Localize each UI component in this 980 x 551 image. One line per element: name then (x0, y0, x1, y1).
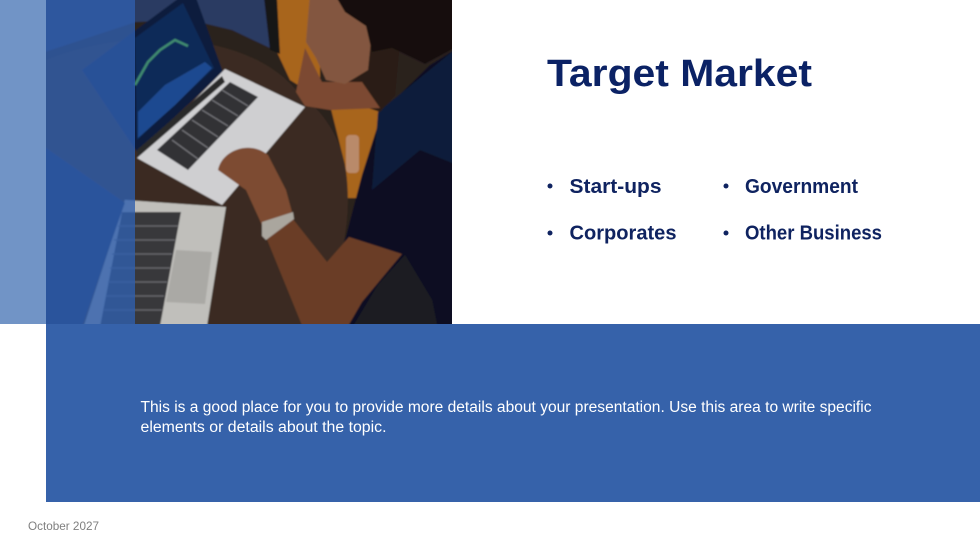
description text: elements or details about the topic. (140, 419, 386, 436)
hand (218, 148, 292, 225)
description text: This is a good place for you to provide more details about your presentation. Use this area to write specific (140, 399, 872, 416)
left light blue strip (0, 0, 46, 324)
bullet: Other Business: Other Business (745, 222, 882, 244)
photo: man working on laptops (46, 0, 452, 324)
round table (135, 45, 349, 324)
water bottle (346, 135, 359, 173)
blue text band (46, 324, 980, 502)
bullet: Start-ups: Start-ups (570, 176, 662, 198)
forearm and upper arm (266, 220, 403, 324)
grey trousers (354, 255, 438, 324)
upper laptop base (137, 69, 305, 205)
hair (337, 0, 452, 64)
wooden floor (272, 0, 381, 198)
blue chair (46, 0, 270, 52)
shirt shoulder (372, 52, 452, 190)
dark navy shirt (345, 52, 452, 324)
lower laptop keyboard (100, 212, 181, 326)
neck (370, 48, 400, 112)
upper laptop screen (82, 0, 223, 152)
bullet: Corporates: Corporates (570, 222, 676, 244)
bullet list (548, 176, 882, 244)
title: Target Market (547, 53, 812, 95)
face (306, 0, 372, 84)
supporting arm (296, 48, 380, 110)
lower laptop base (84, 200, 226, 326)
upper laptop keyboard (157, 82, 258, 170)
date footer: October 2027 (28, 519, 99, 533)
blue overlay (46, 0, 135, 324)
wristbands (262, 212, 294, 240)
photo background (46, 20, 452, 324)
bullet: Government: Government (745, 176, 858, 198)
lower laptop screen (46, 148, 124, 324)
description text (140, 399, 872, 436)
lower laptop trackpad (166, 250, 212, 304)
